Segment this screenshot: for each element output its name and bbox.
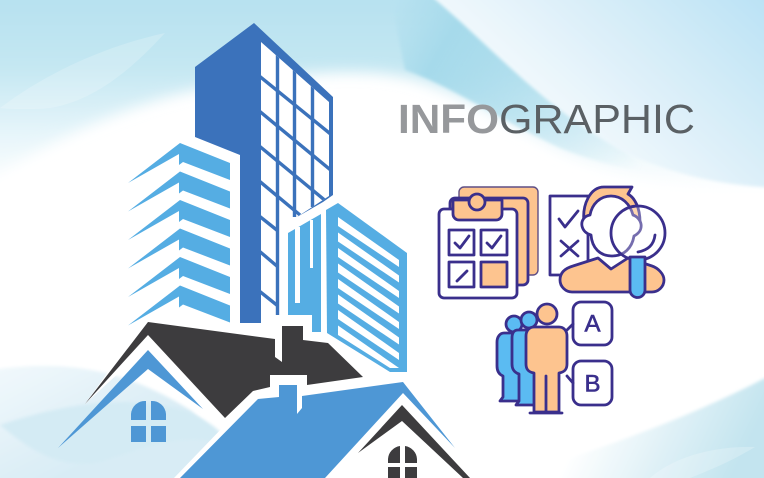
title: GRAPHIC (499, 96, 695, 142)
icon: left house window (131, 401, 166, 442)
left light blue building (128, 143, 230, 326)
back person (497, 316, 526, 401)
answer bubble B (567, 361, 612, 405)
title (398, 96, 695, 142)
icon: clipboards checklist (439, 187, 538, 298)
small dark gable roof (358, 405, 470, 478)
icon: group of people (497, 304, 567, 413)
icon: person with magnifier (550, 187, 665, 298)
middle person (512, 312, 540, 405)
answer bubble B: B (584, 370, 601, 398)
left gable blue roof (58, 350, 203, 448)
right light blue building (288, 203, 407, 372)
blue main roof (180, 382, 455, 478)
white halo behind roofs (85, 316, 480, 478)
dark roof (85, 322, 363, 418)
central dark blue tower (195, 23, 333, 330)
icon: right house window (388, 446, 417, 478)
title: INFO (398, 96, 499, 142)
answer bubble A: A (584, 310, 601, 338)
answer bubble A (567, 302, 612, 345)
front person (526, 304, 567, 413)
